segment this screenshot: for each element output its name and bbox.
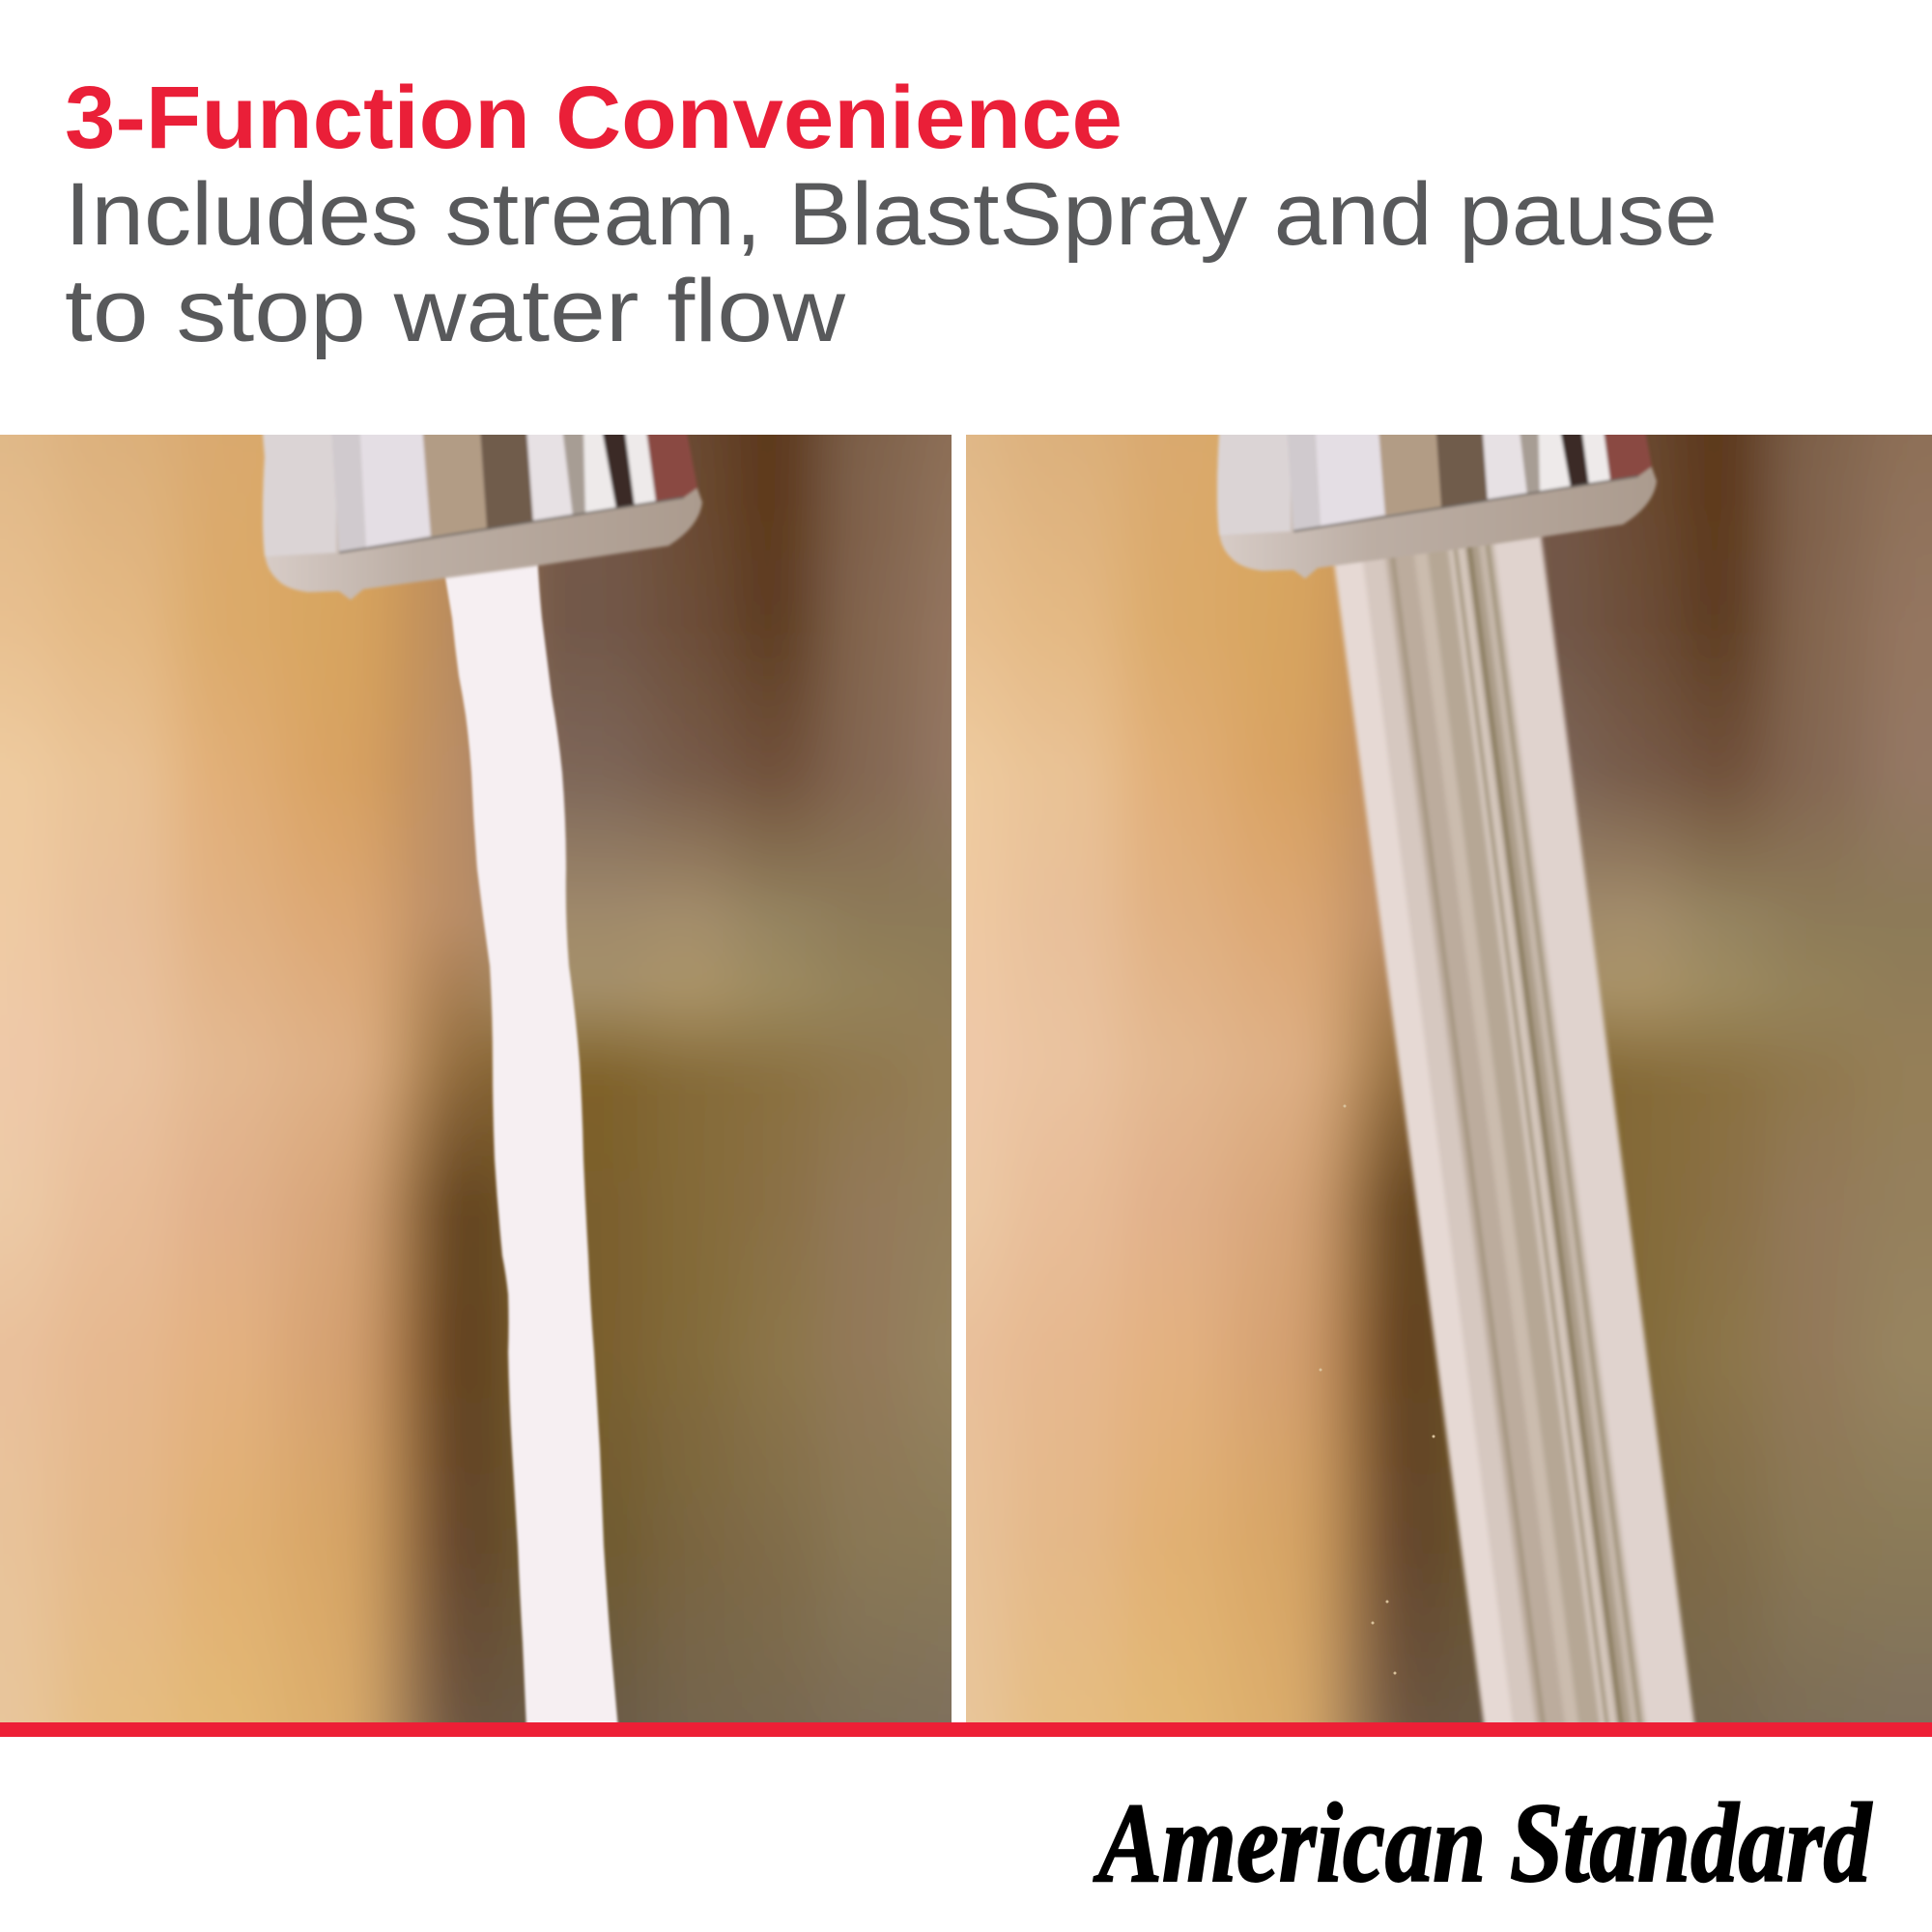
blurred kitchen backdrop xyxy=(0,435,952,1722)
spray water xyxy=(1328,522,1695,1729)
title: 3-Function Convenience xyxy=(65,69,1122,167)
blurred kitchen backdrop xyxy=(966,435,1932,1722)
subtitle line 1: Includes stream, BlastSpray and pause xyxy=(65,165,1718,264)
panel: BlastSpray mode photo xyxy=(966,435,1932,1722)
faucet head xyxy=(1215,435,1659,580)
panel: stream mode photo xyxy=(0,435,952,1722)
water droplets xyxy=(1320,1105,1435,1675)
subtitle line 2: to stop water flow xyxy=(65,262,846,360)
faucet head xyxy=(261,435,704,601)
water stream xyxy=(442,551,618,1729)
red divider bar xyxy=(0,1722,1932,1737)
heading text block xyxy=(65,69,1718,360)
